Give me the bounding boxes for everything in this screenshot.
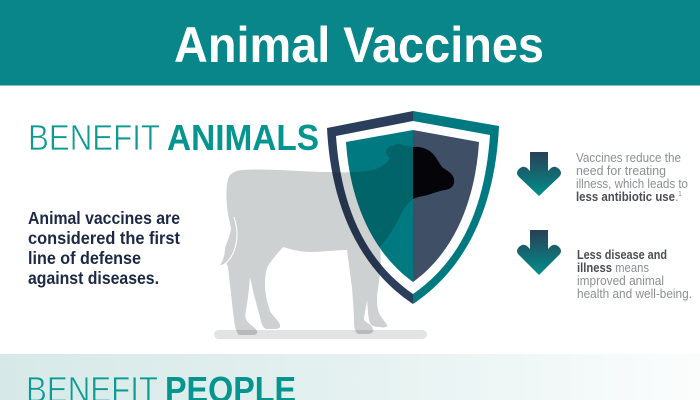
text block: first line of defense: line of defense [28,248,141,268]
title: Animal Vaccines [174,17,544,73]
text block: less antibiotic use: illness, which leads to [576,176,688,191]
cow silhouette [220,144,454,335]
header banner [0,0,700,86]
cow head inside shield [413,146,454,199]
text block: less antibiotic use: need for treating [576,163,666,178]
ground shadow [214,330,427,339]
text block: less antibiotic use: less antibiotic use [576,189,675,204]
text block: first line of defense [28,208,180,288]
text block: less antibiotic use: . [675,189,679,204]
icon: down arrow 2 [517,230,561,275]
icon: down arrow 1 [517,152,561,196]
text block: less antibiotic use [576,150,688,204]
panel: benefit people [0,354,700,400]
text block: first line of defense: against diseases. [28,268,159,288]
tail highlight [224,217,237,265]
text block: improved animal health [577,247,692,301]
shield [327,111,499,304]
text block: less antibiotic use: Vaccines reduce the [576,150,681,165]
text block: first line of defense: Animal vaccines are [28,208,180,228]
heading: benefit animals: BENEFIT [28,117,160,158]
heading: benefit animals [28,117,319,158]
heading: benefit animals: ANIMALS [167,117,319,158]
text block: improved animal health: illness means [577,260,649,275]
text block: less antibiotic use: 1 [678,191,682,198]
text block: improved animal health: health and well-being. [577,286,692,301]
text block: improved animal health: Less disease and [577,247,667,262]
heading: benefit people [26,369,296,400]
text block: first line of defense: considered the first [28,228,180,248]
text block: improved animal health: improved animal [577,273,664,288]
